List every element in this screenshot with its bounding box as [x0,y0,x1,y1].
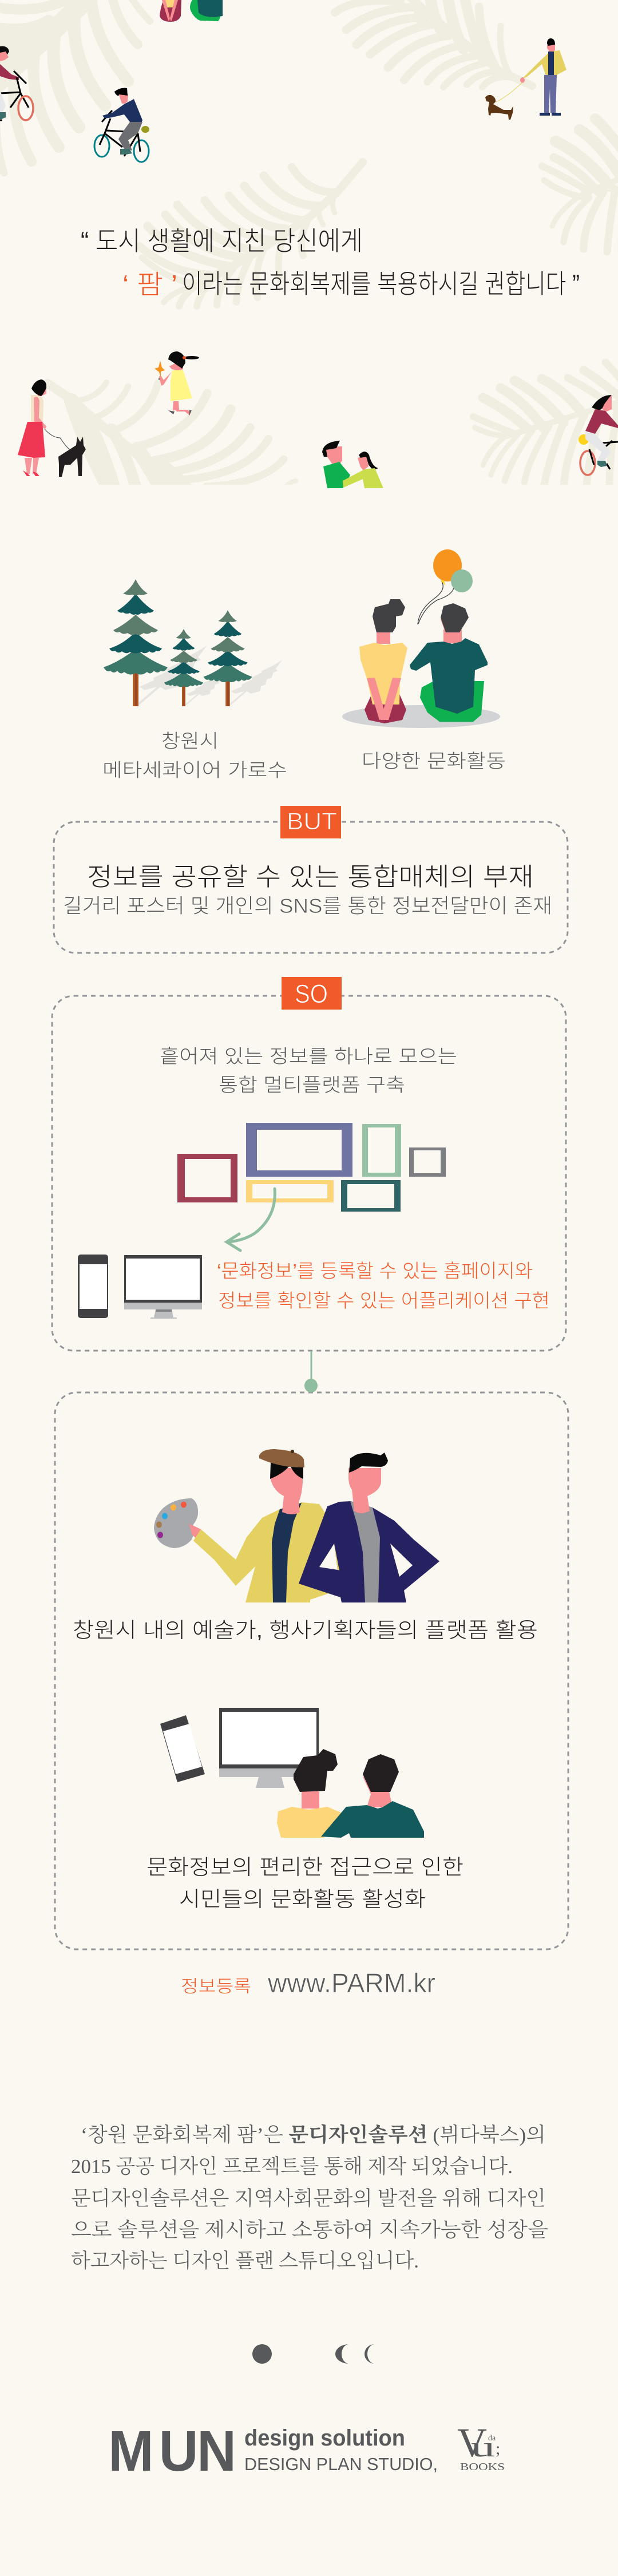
text: build integrated platform: 통합 멀티플랫폼 구축 [219,1074,405,1095]
tag: BUT: BUT [287,808,337,834]
logo: Vu da books: ; [496,2439,500,2458]
decorative palm leaf: behind quote [140,162,363,306]
registration url: 정보등록 [181,1977,251,1996]
figure: man walking dog [485,38,566,120]
tree 3 [204,610,252,706]
decorative palm leaf: right side upper [542,118,618,252]
caption: metasequoia [102,730,287,781]
tree shadows [118,646,297,705]
text: homepage and application [217,1260,550,1311]
icon: tilted smartphone [160,1715,205,1782]
text: homepage and application: 정보를 확인할 수 있는 어플리케이션 구현 [218,1290,550,1311]
registration url [181,1968,435,1998]
text: build integrated platform: 흩어져 있는 정보를 하나로 모으는 [160,1046,457,1067]
connector dot [304,1379,318,1392]
figure: couple talking [322,441,383,488]
figure: left cyclist [0,46,33,120]
logo: Vu da books [457,2420,505,2472]
decorative palm leaf: lower left [47,382,296,492]
tree 1 [104,579,168,706]
icon: paint palette [154,1498,198,1548]
figures: cropped seated couple at top edge [160,0,223,22]
illustration: scattered frames [177,1123,446,1212]
subheading: 길거리 포스터 및 개인의 SNS를 통한 정보전달만이 존재 [63,895,552,917]
about text: 2015 공공 디자인 프로젝트를 통해 제작 되었습니다. [71,2155,513,2178]
icon: large monitor [219,1708,319,1788]
text: improved access [146,1855,464,1911]
registration url: www.PARM.kr [267,1968,435,1998]
decorative palm leaf: top right [335,0,532,87]
quote heading: “ 도시 생활에 지친 당신에게 [81,226,363,256]
logo: Vu da books: BOOKS [460,2461,505,2472]
logo: MUN design solution: MUN [108,2419,236,2483]
figure: right cyclist [579,395,618,475]
icon: smartphone [78,1255,108,1318]
illustration: citizens with devices [160,1708,424,1838]
icon: moon phases [252,2344,375,2364]
decorative palm leaf: lower right [473,362,618,486]
caption: cultural activities: 다양한 문화활동 [362,750,506,771]
logo: Vu da books: V [457,2420,487,2466]
quote heading [81,226,580,299]
quote heading: ‘ 팜 ’ [122,270,177,299]
about text: 으로 솔루션을 제시하고 소통하여 지속가능한 성장을 [71,2219,548,2241]
decorative palm leaf: top left [0,0,150,173]
tag: SO [282,977,342,1010]
panel: BUT [54,806,568,953]
caption: metasequoia: 메타세콰이어 가로수 [102,759,287,781]
about text: 하고자하는 디자인 플랜 스튜디오입니다. [71,2250,419,2272]
panel: outcomes [55,1392,568,1949]
logo: MUN design solution: DESIGN PLAN STUDIO, [244,2454,438,2474]
panel: SO [52,977,566,1351]
text: homepage and application: ‘문화정보’를 등록할 수 있는 홈페이지와 [217,1260,533,1281]
text: improved access: 문화정보의 편리한 접근으로 인한 [146,1855,464,1879]
logo: MUN design solution: design solution [244,2425,405,2451]
illustration: artist and planner [154,1449,439,1602]
figure: woman walking black dog [18,379,86,477]
about text: ‘창원 문화회복제 팜’은 문디자인솔루션 (뷔다북스)의 [81,2124,546,2146]
logo: Vu da books: u [471,2431,495,2463]
about text: 문디자인솔루션은 지역사회문화의 발전을 위해 디자인 [71,2187,546,2210]
icon: desktop monitor [124,1255,202,1319]
tag: SO: SO [295,979,328,1008]
tag: BUT [280,806,341,838]
arrow: frames to devices [227,1189,275,1251]
heading: lack of shared media: 정보를 공유할 수 있는 통합매체의 부재 [87,863,534,891]
about text [71,2124,548,2272]
caption: metasequoia: 창원시 [161,730,219,751]
illustration: metasequoia trees [104,579,297,706]
text: build integrated platform [160,1046,457,1095]
figure: cyclist with teal wheels [94,88,149,162]
text: artists use platform: 창원시 내의 예술가, 행사기획자들의 플랫폼 활용 [73,1619,538,1642]
logo: Vu da books: da [488,2434,496,2443]
text: improved access: 시민들의 문화활동 활성화 [179,1888,426,1911]
tree 2 [164,629,203,706]
figure: girl with pinwheel [154,351,199,416]
logo: MUN design solution [108,2419,438,2483]
connector line [310,1351,312,1382]
illustration: couple with balloons [342,549,500,728]
